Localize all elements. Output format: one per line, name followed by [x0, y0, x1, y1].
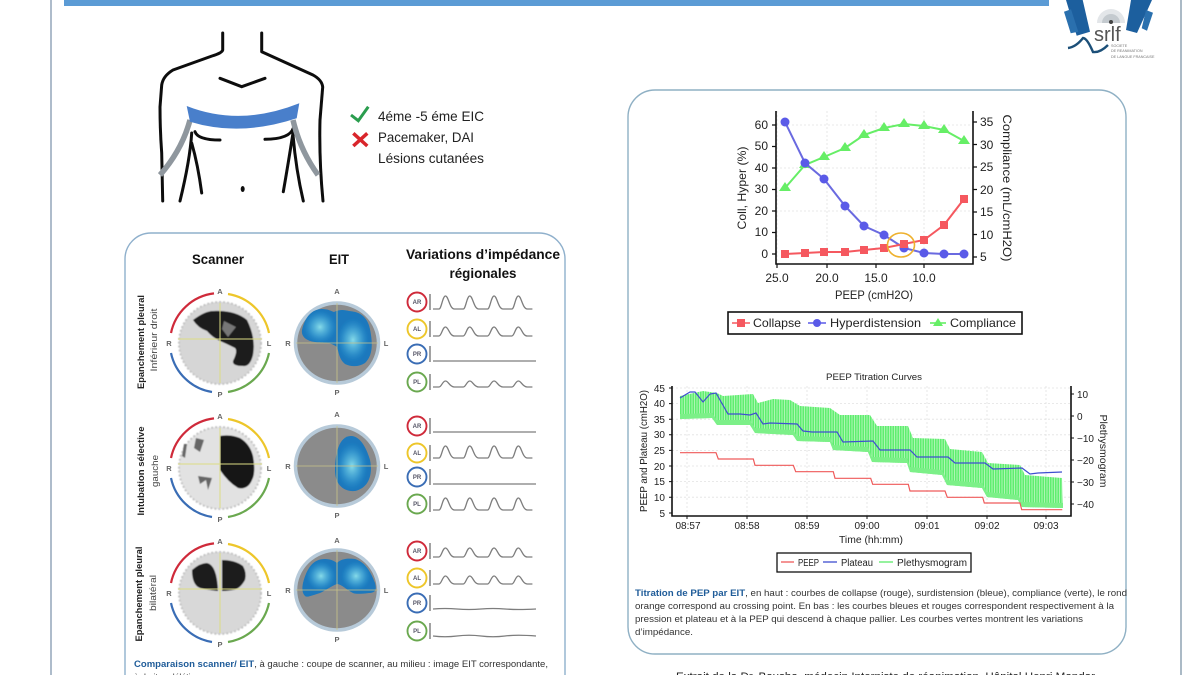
logo: srlf: SOCIETE	[1111, 44, 1128, 48]
logo: srlf: DE LANGUE FRANCAISE	[1111, 55, 1155, 59]
y axis labels right: 30	[980, 138, 994, 152]
heading: Scanner: Scanner	[192, 252, 245, 267]
x axis labels: 08:58	[734, 521, 760, 532]
panel: titration de PEP	[628, 90, 1127, 654]
legend	[777, 553, 971, 572]
impedance traces group 3	[408, 542, 536, 640]
axis title: PEEP: PEEP (cmH2O)	[835, 288, 913, 302]
series: plethysmogram	[680, 391, 1063, 508]
x axis labels	[675, 521, 1059, 532]
x axis labels: 15.0	[864, 271, 888, 285]
note: site: 4éme -5 éme EIC	[378, 108, 484, 124]
placement notes	[351, 107, 484, 166]
scanner image 2: L	[267, 464, 272, 473]
scanner image 3: A	[217, 537, 223, 546]
y axis labels left: 60	[755, 118, 768, 132]
impedance traces group 1: AL	[413, 327, 421, 333]
x axis labels: 08:57	[675, 521, 701, 532]
EIT image 2: L	[384, 462, 389, 471]
logo: srlf	[1064, 0, 1155, 59]
axis title: time: Time (hh:mm)	[839, 535, 903, 546]
series: plateau	[680, 392, 1062, 474]
series: compliance	[779, 118, 970, 191]
axis title: Coll, Hyper: Coll, Hyper (%)	[735, 146, 749, 230]
y axis labels left	[755, 118, 768, 261]
EIT image 1: R	[285, 339, 291, 348]
y axis labels right: −20	[1077, 456, 1094, 467]
y axis labels left: 45	[654, 384, 665, 395]
y axis labels right: 0	[1077, 412, 1083, 423]
chart title: PEEP Titration Curves	[826, 372, 922, 383]
y axis labels left: 10	[755, 225, 768, 239]
legend: Compliance	[950, 316, 1016, 330]
series: collapse	[781, 195, 968, 258]
impedance traces group 2: PL	[413, 502, 421, 508]
impedance traces group 3: PL	[413, 629, 421, 635]
y axis labels left: 15	[654, 477, 665, 488]
impedance traces group 2: PR	[413, 475, 422, 481]
logo: srlf: srlf	[1094, 24, 1121, 46]
scanner image 1: R	[166, 339, 172, 348]
row label 2: Intubation sélective	[136, 426, 147, 516]
scanner image 3: R	[166, 589, 172, 598]
caption: comparaison: Comparaison scanner/ EIT, à gauche : coupe de scanner, au milieu : image EIT correspondante,	[134, 659, 548, 670]
y axis labels left: 40	[755, 161, 768, 175]
chart: PEEP titration curves	[639, 372, 1108, 572]
impedance traces group 2	[408, 416, 536, 514]
impedance traces group 2: AR	[413, 424, 422, 430]
y axis labels left: 10	[654, 493, 665, 504]
x axis labels	[765, 271, 936, 285]
y axis labels left: 40	[654, 399, 665, 410]
crossing point ring	[888, 233, 914, 257]
scanner image 3: L	[267, 589, 272, 598]
EIT image 2: A	[334, 410, 340, 419]
impedance traces group 3: AR	[413, 549, 422, 555]
x axis labels: 10.0	[912, 271, 936, 285]
row label 1: Inférieur droit	[149, 308, 160, 372]
y axis labels right: 15	[980, 205, 994, 219]
heading: Variations	[406, 247, 560, 281]
legend: PEEP	[798, 558, 819, 569]
y axis labels right: 10	[980, 228, 994, 242]
logo: srlf: DE REANIMATION	[1111, 49, 1143, 53]
EIT image 2	[285, 410, 389, 520]
heading: Variations: régionales	[450, 266, 516, 281]
legend: Collapse	[753, 316, 801, 330]
axis title: PEEP and plateau: PEEP and Plateau (cmH2O)	[639, 390, 650, 512]
x axis labels: 09:00	[854, 521, 880, 532]
impedance traces group 1	[408, 292, 536, 392]
heading: Variations: Variations d’impédance	[406, 247, 560, 262]
chart: collapse hyperdistension compliance	[728, 111, 1022, 334]
note: contraindication 1: Pacemaker, DAI	[378, 129, 474, 145]
EIT image 3: A	[334, 536, 340, 545]
row label 1: Epanchement pleural	[136, 295, 147, 389]
caption: titration: pression et plateau et à la PEP qui descend à chaque pallier. Les courbes vertes montrent les variations	[635, 614, 1083, 625]
impedance traces group 3: AL	[413, 576, 421, 582]
row label 1	[136, 295, 160, 389]
row label 3: Epanchement pleural	[134, 546, 145, 642]
y axis labels right: 20	[980, 183, 994, 197]
y axis labels left	[654, 384, 665, 520]
scanner image 1	[166, 287, 272, 399]
y axis labels left: 5	[659, 509, 665, 520]
legend: Plethysmogram	[897, 558, 967, 569]
row label 3	[134, 546, 159, 642]
y axis labels right: −10	[1077, 434, 1094, 445]
x axis labels: 09:02	[974, 521, 1000, 532]
y axis labels left: 50	[755, 139, 768, 153]
y axis labels left: 20	[755, 204, 768, 218]
legend: Hyperdistension	[830, 316, 921, 330]
x axis labels: 20.0	[815, 271, 839, 285]
y axis labels right: −40	[1077, 500, 1094, 511]
EIT image 1: A	[334, 287, 340, 296]
legend: Plateau	[841, 558, 873, 569]
scanner image 1: L	[267, 339, 272, 348]
caption: titration	[635, 588, 1127, 638]
scanner image 2	[166, 412, 272, 524]
axis title: Compliance: Compliance (mL/cmH2O)	[1000, 114, 1014, 262]
EIT image 3	[285, 536, 389, 644]
EIT image 1: L	[384, 339, 389, 348]
EIT image 1	[285, 287, 389, 397]
x axis labels: 09:03	[1033, 521, 1059, 532]
scanner image 2: P	[217, 515, 223, 524]
impedance traces group 1: PL	[413, 380, 421, 386]
EIT image 3: L	[384, 586, 389, 595]
y axis labels left: 30	[755, 182, 768, 196]
scanner image 3	[166, 537, 272, 649]
icon: cross	[353, 133, 367, 146]
EIT image 2: R	[285, 462, 291, 471]
x axis labels: 09:01	[914, 521, 940, 532]
caption: titration: d’impédance.	[635, 627, 693, 638]
y axis labels left: 20	[654, 462, 665, 473]
heading: EIT: EIT	[329, 252, 350, 267]
scanner image 3: P	[217, 640, 223, 649]
impedance traces group 3: PR	[413, 601, 422, 607]
scanner image 2: A	[217, 412, 223, 421]
y axis labels right: 25	[980, 160, 994, 174]
note: contraindication 2: Lésions cutanées	[378, 150, 484, 166]
y axis labels left: 35	[654, 415, 665, 426]
y axis labels left: 25	[654, 446, 665, 457]
impedance traces group 1: PR	[413, 352, 422, 358]
impedance traces group 1: AR	[413, 300, 422, 306]
legend	[728, 312, 1022, 334]
row label 3: bilatéral	[148, 575, 159, 611]
x axis labels: 08:59	[794, 521, 820, 532]
y axis labels right: 35	[980, 115, 994, 129]
y axis labels right	[1077, 390, 1094, 511]
scanner image 1: A	[217, 287, 223, 296]
EIT image 1: P	[334, 388, 340, 397]
scanner image 1: P	[217, 390, 223, 399]
y axis labels right: 10	[1077, 390, 1089, 401]
y axis labels left: 30	[654, 430, 665, 441]
torso illustration with EIT belt	[160, 33, 323, 201]
icon: check	[351, 107, 368, 121]
series: hyperdistension	[780, 118, 968, 258]
EIT image 2: P	[334, 511, 340, 520]
y axis labels left: 0	[761, 247, 768, 261]
series: PEEP	[680, 453, 1062, 510]
y axis labels right: 5	[980, 250, 987, 264]
x axis labels: 25.0	[765, 271, 789, 285]
y axis labels right: −30	[1077, 478, 1094, 489]
y axis labels right	[980, 115, 994, 264]
impedance traces group 2: AL	[413, 451, 421, 457]
EIT image 3: P	[334, 635, 340, 644]
caption: titration: orange correspond au crossing point. En bas : les courbes bleues et rouges correspondent respectivement à la	[635, 601, 1115, 612]
axis title: plethysmogram: Plethysmogram	[1097, 415, 1108, 487]
caption: comparaison	[134, 659, 548, 675]
row label 2	[136, 426, 161, 516]
row label 2: gauche	[150, 455, 161, 487]
caption: titration: Titration de PEP par EIT, en haut : courbes de collapse (rouge), surdistension (bleue), compliance (verte), le rond	[635, 588, 1127, 599]
EIT image 3: R	[285, 586, 291, 595]
scanner image 2: R	[166, 464, 172, 473]
top header bar	[64, 0, 1049, 6]
panel: comparaison scanner / EIT	[125, 233, 565, 675]
